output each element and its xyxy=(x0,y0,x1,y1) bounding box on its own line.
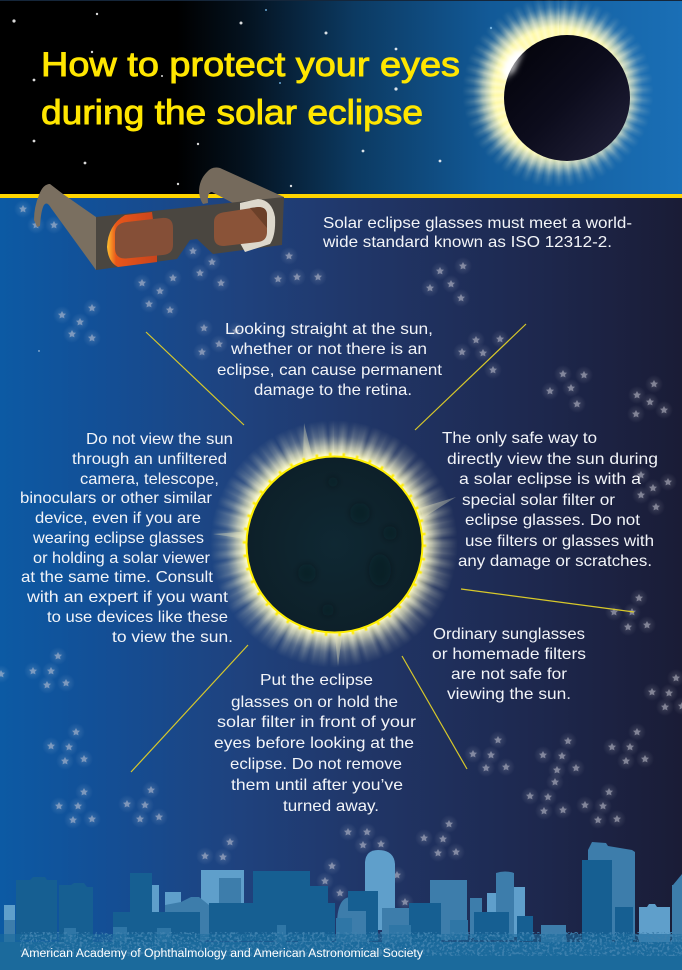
text: unfiltered devices: camera, telescope, xyxy=(80,471,219,488)
text: unfiltered devices: binoculars or other similar xyxy=(20,490,213,507)
text: unfiltered devices: at the same time. Consult xyxy=(21,569,214,586)
text: safe way to view: eclipse glasses. Do not xyxy=(465,512,641,529)
text: unfiltered devices: Do not view the sun xyxy=(86,431,233,448)
pointer lines xyxy=(131,324,634,772)
text: safe way to view: any damage or scratches. xyxy=(458,553,652,570)
text: put the glasses on: glasses on or hold the xyxy=(231,694,398,711)
text: ordinary sunglasses: or homemade filters xyxy=(432,646,586,663)
text: glasses standard: Solar eclipse glasses must meet a world- xyxy=(323,215,632,232)
text: glasses standard: wide standard known as ISO 12312-2. xyxy=(322,234,612,251)
text: ordinary sunglasses: are not safe for xyxy=(451,666,568,683)
eclipse illustration: top right xyxy=(464,0,652,186)
text: put the glasses on: turned away. xyxy=(283,798,379,815)
corona rays xyxy=(212,422,456,666)
text: safe way to view: special solar filter or xyxy=(462,492,616,509)
text: looking at the sun: eclipse, can cause permanent xyxy=(217,362,443,379)
text: put the glasses on: Put the eclipse xyxy=(260,672,373,689)
left temple xyxy=(34,184,96,270)
text: unfiltered devices: through an unfiltered xyxy=(72,451,227,468)
title xyxy=(41,46,460,132)
text: unfiltered devices: device, even if you are xyxy=(35,510,201,527)
text: safe way to view: directly view the sun during xyxy=(447,451,658,468)
text: ordinary sunglasses: viewing the sun. xyxy=(447,686,571,703)
top eclipse corona xyxy=(458,0,658,192)
text: put the glasses on xyxy=(214,672,417,815)
central eclipse xyxy=(212,422,456,666)
right temple xyxy=(199,168,284,212)
text: unfiltered devices xyxy=(20,431,233,646)
text: looking at the sun: whether or not there is an xyxy=(230,341,427,358)
source credit: American Academy of Ophthalmology and American Astronomical Society xyxy=(21,948,423,960)
title: How to protect your eyes xyxy=(41,46,460,84)
text: put the glasses on: them until after you’ve xyxy=(231,777,403,794)
text: safe way to view: a solar eclipse is with a xyxy=(459,471,641,488)
text: ordinary sunglasses: Ordinary sunglasses xyxy=(433,626,585,643)
text: safe way to view: use filters or glasses with xyxy=(465,533,654,550)
text: ordinary sunglasses xyxy=(432,626,586,703)
front frame xyxy=(96,197,284,270)
moon disc xyxy=(248,458,422,632)
text: looking at the sun: damage to the retina. xyxy=(254,382,412,399)
title: during the solar eclipse xyxy=(41,94,423,132)
left filter with solar pattern xyxy=(107,212,157,267)
text: unfiltered devices: or holding a solar viewer xyxy=(33,550,211,567)
text: looking at the sun: Looking straight at the sun, xyxy=(225,321,433,338)
stars xyxy=(0,200,682,911)
text: unfiltered devices: with an expert if you want xyxy=(26,589,229,606)
text: put the glasses on: eyes before looking at the xyxy=(214,735,414,752)
text: unfiltered devices: wearing eclipse glasses xyxy=(32,530,204,547)
text: looking at the sun xyxy=(217,321,443,399)
text: safe way to view: The only safe way to xyxy=(442,430,597,447)
text: unfiltered devices: to view the sun. xyxy=(112,629,233,646)
text: unfiltered devices: to use devices like these xyxy=(47,609,228,626)
text: glasses standard xyxy=(322,215,632,251)
right filter with moon pattern xyxy=(240,199,275,252)
text: put the glasses on: solar filter in front of your xyxy=(217,714,417,731)
city skyline xyxy=(0,842,682,970)
text: safe way to view xyxy=(442,430,658,570)
moon disc xyxy=(504,35,630,161)
text: put the glasses on: eclipse. Do not remove xyxy=(230,756,402,773)
gold divider band xyxy=(0,194,682,198)
